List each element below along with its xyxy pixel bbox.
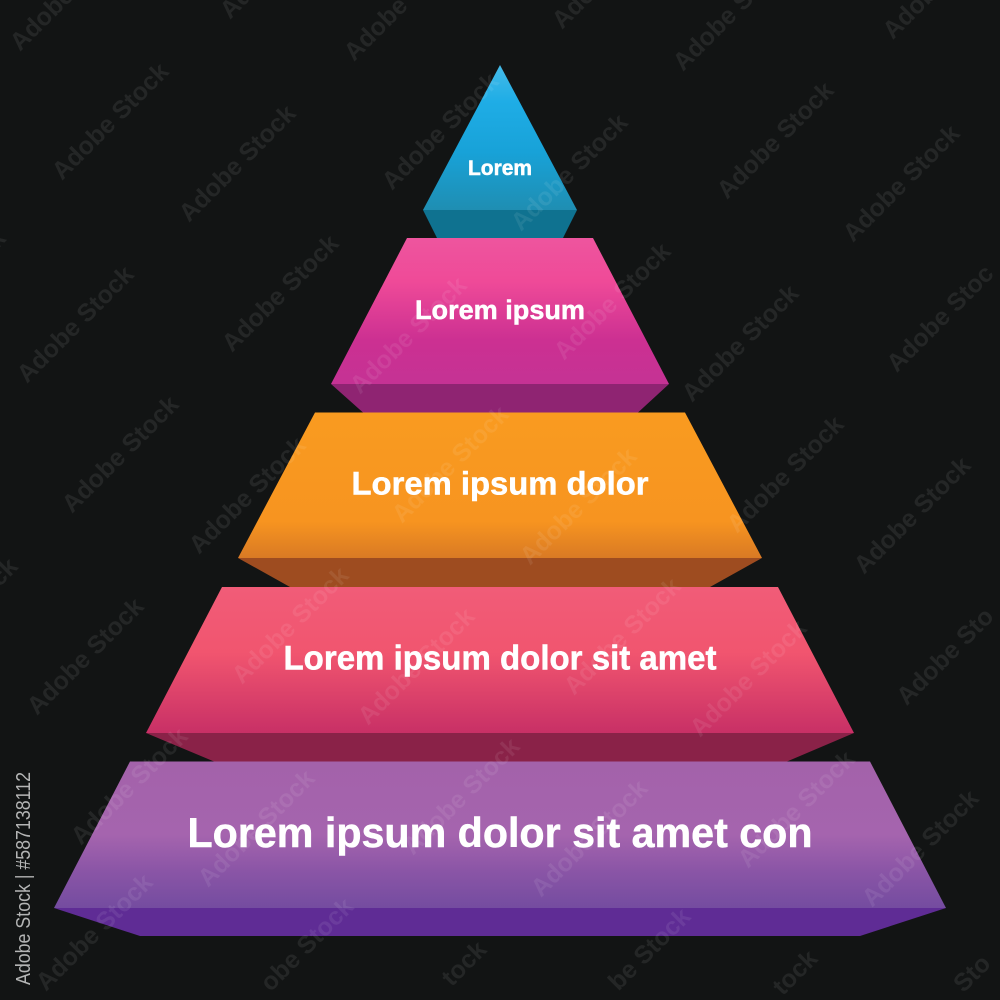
watermarks: Adobe Stock — [525, 774, 653, 902]
watermarks: Adobe Stock — [56, 390, 184, 518]
watermarks: Adobe Stock — [344, 271, 472, 399]
watermarks: Adobe Stock — [65, 722, 193, 850]
tier 2: magenta segment — [331, 238, 669, 412]
watermarks: Adobe Stock — [397, 732, 525, 860]
watermarks: Adobe Stock — [514, 442, 642, 570]
watermarks: Adobe Stock — [711, 76, 839, 204]
watermarks: Adobe Stock — [352, 602, 480, 730]
watermarks: Adobe Stock — [732, 745, 860, 873]
watermarks: Adobe Stock — [46, 57, 174, 185]
tier 2: magenta segment: Lorem ipsum — [415, 295, 585, 325]
watermarks: Adobe Stock — [548, 237, 676, 365]
pyramid — [54, 65, 946, 936]
watermarks: Adobe Sto — [891, 602, 999, 711]
watermarks: be Stock — [603, 902, 696, 996]
watermarks: Adobe Stoc — [881, 259, 999, 377]
watermarks: Adobe Stock — [721, 410, 849, 538]
watermarks: Adobe Stock — [11, 260, 139, 388]
watermarks: Adobe Stock — [505, 108, 633, 236]
watermarks: Adobe Stock — [173, 99, 301, 227]
watermarks: Adobe Stock — [684, 614, 812, 742]
watermarks: Sto — [948, 949, 996, 998]
tier 5: purple base segment — [54, 762, 946, 936]
tier 1: top blue segment — [423, 65, 577, 238]
watermarks: obe Stock — [255, 892, 359, 997]
watermarks: Adobe Stock — [21, 592, 149, 720]
watermarks: Adobe Stock — [837, 119, 965, 247]
watermarks: Adobe Stock — [226, 561, 354, 689]
tier 4: coral pink segment — [146, 587, 854, 762]
watermarks: Adobe Stock — [376, 67, 504, 195]
tier 3: orange segment — [238, 412, 762, 587]
tier 4: coral pink segment: Lorem ipsum dolor sit amet — [284, 640, 716, 678]
watermarks: tock — [436, 935, 492, 992]
tier 3: orange segment: Lorem ipsum dolor — [352, 466, 648, 502]
watermarks: Adobe Stock — [216, 229, 344, 357]
watermarks: Adobe Stock — [848, 451, 976, 579]
watermarks: Adobe Stock — [192, 764, 320, 892]
watermarks: Adobe Stock — [183, 431, 311, 559]
watermarks: tock — [767, 944, 823, 1000]
watermarks: Adobe Stock — [386, 400, 514, 528]
vertical stock credit: Adobe Stock | #587138112 — [13, 772, 35, 985]
watermarks: Adobe Stock — [30, 868, 158, 996]
watermarks: Adobe Stock — [558, 572, 686, 700]
watermarks: Adobe Stock — [676, 279, 804, 407]
watermarks: Adobe Stock — [856, 784, 984, 912]
tier 5: purple base segment: Lorem ipsum dolor sit amet con — [188, 809, 812, 856]
tier 1: top blue segment: Lorem — [468, 157, 532, 180]
